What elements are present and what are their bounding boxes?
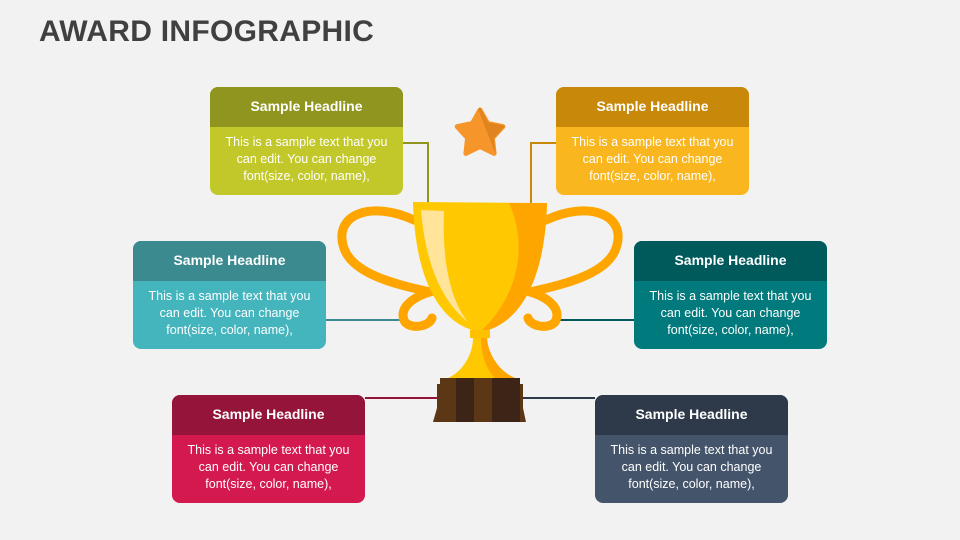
panel: dark teal: font(size, color, name),: [667, 323, 794, 337]
panel: gold: [556, 87, 749, 195]
panel: gold: can edit. You can change: [583, 152, 722, 166]
panel: olive: can edit. You can change: [237, 152, 376, 166]
panel: dark teal: Sample Headline: [674, 252, 787, 268]
panel: slate: This is a sample text that you: [611, 443, 772, 457]
panel: slate: font(size, color, name),: [628, 477, 755, 491]
panel: light teal: can edit. You can change: [160, 306, 299, 320]
panel: crimson: Sample Headline: [212, 406, 325, 422]
panel: gold: Sample Headline: [596, 98, 709, 114]
panel: crimson: can edit. You can change: [199, 460, 338, 474]
icon: star: [454, 107, 506, 156]
panel: slate: Sample Headline: [635, 406, 748, 422]
panel: light teal: This is a sample text that you: [149, 289, 310, 303]
connector lines: [326, 143, 634, 398]
panel: olive: [210, 87, 403, 195]
panel: slate: [595, 395, 788, 503]
panel: olive: font(size, color, name),: [243, 169, 370, 183]
panel: dark teal: [634, 241, 827, 349]
panel: light teal: Sample Headline: [173, 252, 286, 268]
panel: slate: can edit. You can change: [622, 460, 761, 474]
panel: olive: This is a sample text that you: [226, 135, 387, 149]
panel: crimson: font(size, color, name),: [205, 477, 332, 491]
panel: dark teal: This is a sample text that you: [650, 289, 811, 303]
panel: crimson: This is a sample text that you: [188, 443, 349, 457]
panel: light teal: [133, 241, 326, 349]
panel: gold: This is a sample text that you: [572, 135, 733, 149]
panel: gold: font(size, color, name),: [589, 169, 716, 183]
panel: crimson: [172, 395, 365, 503]
title: AWARD INFOGRAPHIC: [39, 15, 374, 48]
panel: olive: Sample Headline: [250, 98, 363, 114]
panel: light teal: font(size, color, name),: [166, 323, 293, 337]
icon: trophy: [342, 202, 618, 422]
panel: dark teal: can edit. You can change: [661, 306, 800, 320]
connectors and trophy: [326, 107, 634, 422]
